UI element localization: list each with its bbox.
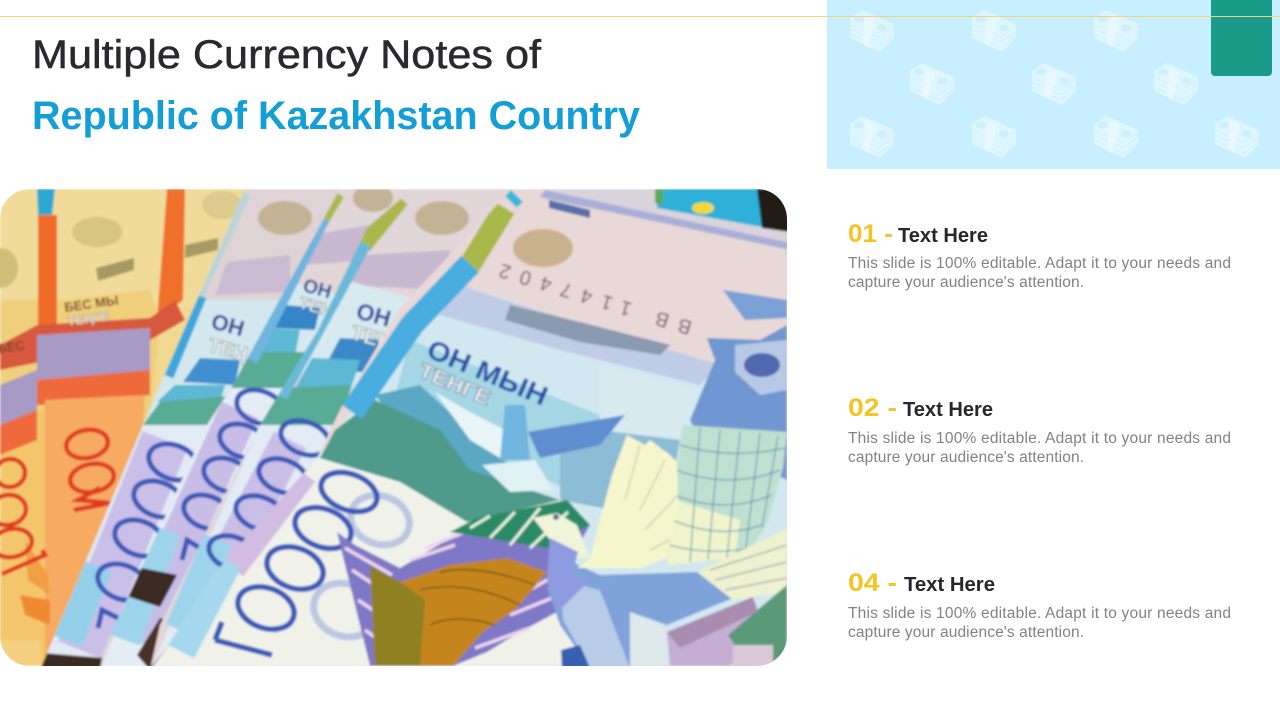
item 01 heading: Text Here bbox=[898, 225, 988, 247]
note lettering: тенге: ТЕНГЕ bbox=[415, 359, 494, 410]
note lettering: те: ТЕҢ bbox=[206, 335, 251, 366]
photo: Kazakhstan tenge banknotes bbox=[0, 184, 800, 670]
item 02 description: This slide is 100% editable. Adapt it to your needs and bbox=[848, 430, 1231, 447]
title line 1: Multiple Currency Notes of bbox=[32, 33, 542, 77]
note lettering: те: ТЕҢ bbox=[349, 322, 395, 355]
banknote 1 bbox=[40, 189, 340, 666]
item 02 heading: Text Here bbox=[903, 399, 993, 421]
orange dove wing bbox=[399, 556, 548, 666]
item 02 number: 02 - bbox=[848, 394, 897, 422]
banknote 4 (front) bbox=[151, 189, 787, 666]
grid tower bbox=[667, 425, 787, 565]
ornament around orange dove bbox=[336, 524, 590, 666]
tower ornament bbox=[690, 325, 787, 480]
item 04 heading: Text Here bbox=[904, 574, 995, 596]
item 01 description bbox=[848, 255, 1231, 291]
serial number: BB 1147402 bbox=[497, 259, 694, 338]
item 01 description: This slide is 100% editable. Adapt it to your needs and bbox=[848, 255, 1231, 272]
note lettering: он: ОН bbox=[354, 298, 394, 332]
note lettering: он: ОН bbox=[209, 309, 247, 341]
icon: money stacks pattern bbox=[850, 10, 1259, 158]
5000 digits bbox=[0, 427, 116, 574]
item 02 description: capture your audience's attention. bbox=[848, 449, 1084, 466]
note lettering: он мын: ОН МЫН bbox=[423, 334, 552, 412]
small white dove bbox=[435, 392, 625, 492]
item 01 description: capture your audience's attention. bbox=[848, 274, 1084, 291]
item 04 description bbox=[848, 605, 1231, 641]
banknote 2 bbox=[98, 189, 394, 666]
item 01 bbox=[848, 220, 1231, 291]
teal accent tab bbox=[1211, 0, 1272, 76]
item 04 description: This slide is 100% editable. Adapt it to your needs and bbox=[848, 605, 1231, 622]
item 04 description: capture your audience's attention. bbox=[848, 624, 1084, 641]
panel: light blue money pattern bbox=[827, 0, 1280, 169]
note lettering: бес мың: БЕС МЫ bbox=[63, 293, 119, 315]
title line 2: Republic of Kazakhstan Country bbox=[32, 94, 641, 138]
banknote 3 bbox=[149, 198, 470, 666]
yellow 5000 notes bbox=[0, 189, 246, 666]
10000 digits bbox=[215, 465, 382, 655]
item 04 number: 04 - bbox=[848, 569, 897, 597]
large white dove bbox=[533, 435, 787, 668]
note lettering: те: ТЕҢ bbox=[297, 294, 335, 321]
note lettering: он: ОН bbox=[301, 276, 334, 303]
item 04 bbox=[848, 569, 1231, 641]
item 02 description bbox=[848, 430, 1231, 466]
title bbox=[32, 33, 641, 138]
roof lower right bbox=[667, 585, 787, 666]
item 02 bbox=[848, 394, 1231, 466]
item 01 number: 01 - bbox=[848, 220, 893, 248]
faint secondary digits bbox=[306, 487, 416, 645]
note lettering: теңге: ТЕҢГЕ bbox=[66, 308, 110, 329]
